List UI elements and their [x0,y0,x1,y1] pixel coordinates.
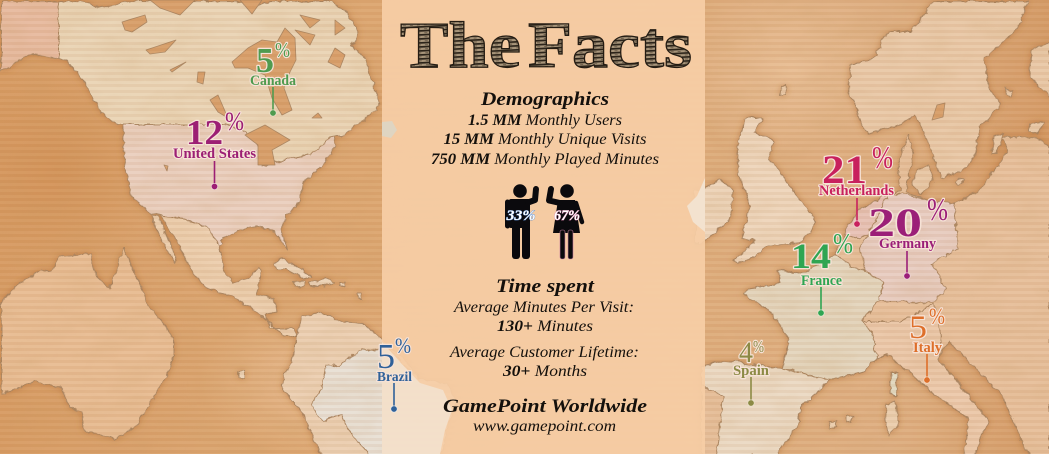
landmass: Alaska corner [0,0,57,70]
landmass: France [743,253,882,378]
panel: torn-paper patch left [382,121,397,138]
landmass: Scandinavia [848,0,1027,177]
Hudson Bay [232,28,296,115]
callout: Netherlands: Netherlands [819,183,894,199]
callout: Germany: 20 [868,200,922,245]
landmass: Caribbean islands [238,258,360,377]
callout: Spain: 4 [739,336,753,369]
text block: demographics [431,89,659,168]
callout: United States: % [225,107,244,136]
stat: 33 percent: 33% [505,208,536,224]
callout: France: % [833,229,853,260]
callout: Netherlands: % [872,139,893,175]
monthly played minutes: 750 MM Monthly Played Minutes [431,151,659,168]
landmass: Canada [57,0,378,165]
callout: France [791,229,853,316]
title word: Facts: Facts [528,9,692,82]
monthly unique visits: 15 MM Monthly Unique Visits [444,131,646,148]
landmass: west continent [0,247,172,438]
landmass: Finland [1028,40,1049,95]
icon: man [508,184,536,259]
central panel [382,0,705,454]
title [400,9,692,82]
landmass: Germany [860,193,957,302]
text block: brand footer [443,396,648,435]
landmass: United States [122,123,335,248]
callout: Spain: Spain [733,363,769,379]
text block: time spent [449,276,639,380]
callout: Italy [909,304,945,383]
callout: United States: United States [173,146,256,162]
callout: Brazil: % [395,333,411,358]
landmass: Baja [150,215,175,262]
callout: Netherlands [819,139,894,227]
30+ months: 30+ Months [502,363,587,380]
callout: Brazil: Brazil [377,370,412,385]
landmass: Baltic islands [779,83,1043,193]
landmass: Mexico and Central America [150,213,295,335]
callout: Canada: % [275,38,290,62]
callout: Spain [733,336,769,406]
panel: torn-paper patch right [687,178,705,232]
callout: Brazil: 5 [377,337,395,376]
icon: woman [549,184,582,259]
callout: Italy: 5 [909,310,927,346]
callout: Spain: % [753,337,764,356]
callout: Italy: % [929,304,945,329]
callout: Brazil [377,333,412,412]
callout: Netherlands: 21 [822,147,867,192]
callout: United States [173,107,256,190]
callout: France: 14 [791,236,831,276]
panel: Brazil showing through [382,342,452,454]
landmass: South America [282,312,455,454]
callout: Canada: Canada [250,73,297,89]
callout: United States: 12 [186,113,223,152]
landmass: Spain [700,360,828,454]
brand name: GamePoint Worldwide [443,396,648,417]
icon: man and woman gender split [505,184,582,259]
landmass: Netherlands [843,193,887,237]
stat: 67 percent: 67% [554,208,580,224]
heading: demographics: Demographics [480,89,609,110]
average customer lifetime: Average Customer Lifetime: [449,344,639,361]
landmass: Great Britain [732,117,815,262]
callout: Germany [868,191,948,279]
title word: The: The [400,9,521,82]
website: www.gamepoint.com [473,418,616,435]
callout: Germany: % [927,191,948,227]
callout: Canada [250,38,297,116]
landmass: Brazil [310,342,455,454]
average minutes per visit: Average Minutes Per Visit: [453,299,634,316]
callout: France: France [801,273,843,289]
monthly users: 1.5 MM Monthly Users [468,112,622,129]
landmass: Italy [860,303,987,454]
130+ minutes: 130+ Minutes [497,318,593,335]
Arctic channels and lakes [122,0,945,171]
heading: time spent: Time spent [496,276,595,297]
landmass: Sardinia and Balearics [828,400,897,434]
landmass: mainland Europe [700,133,1049,454]
landmass: Corsica [889,372,896,395]
landmass: Ireland [695,178,733,242]
callout: Germany: Germany [879,236,937,252]
callout: Italy: Italy [913,340,943,356]
callout: Canada: 5 [256,41,274,80]
